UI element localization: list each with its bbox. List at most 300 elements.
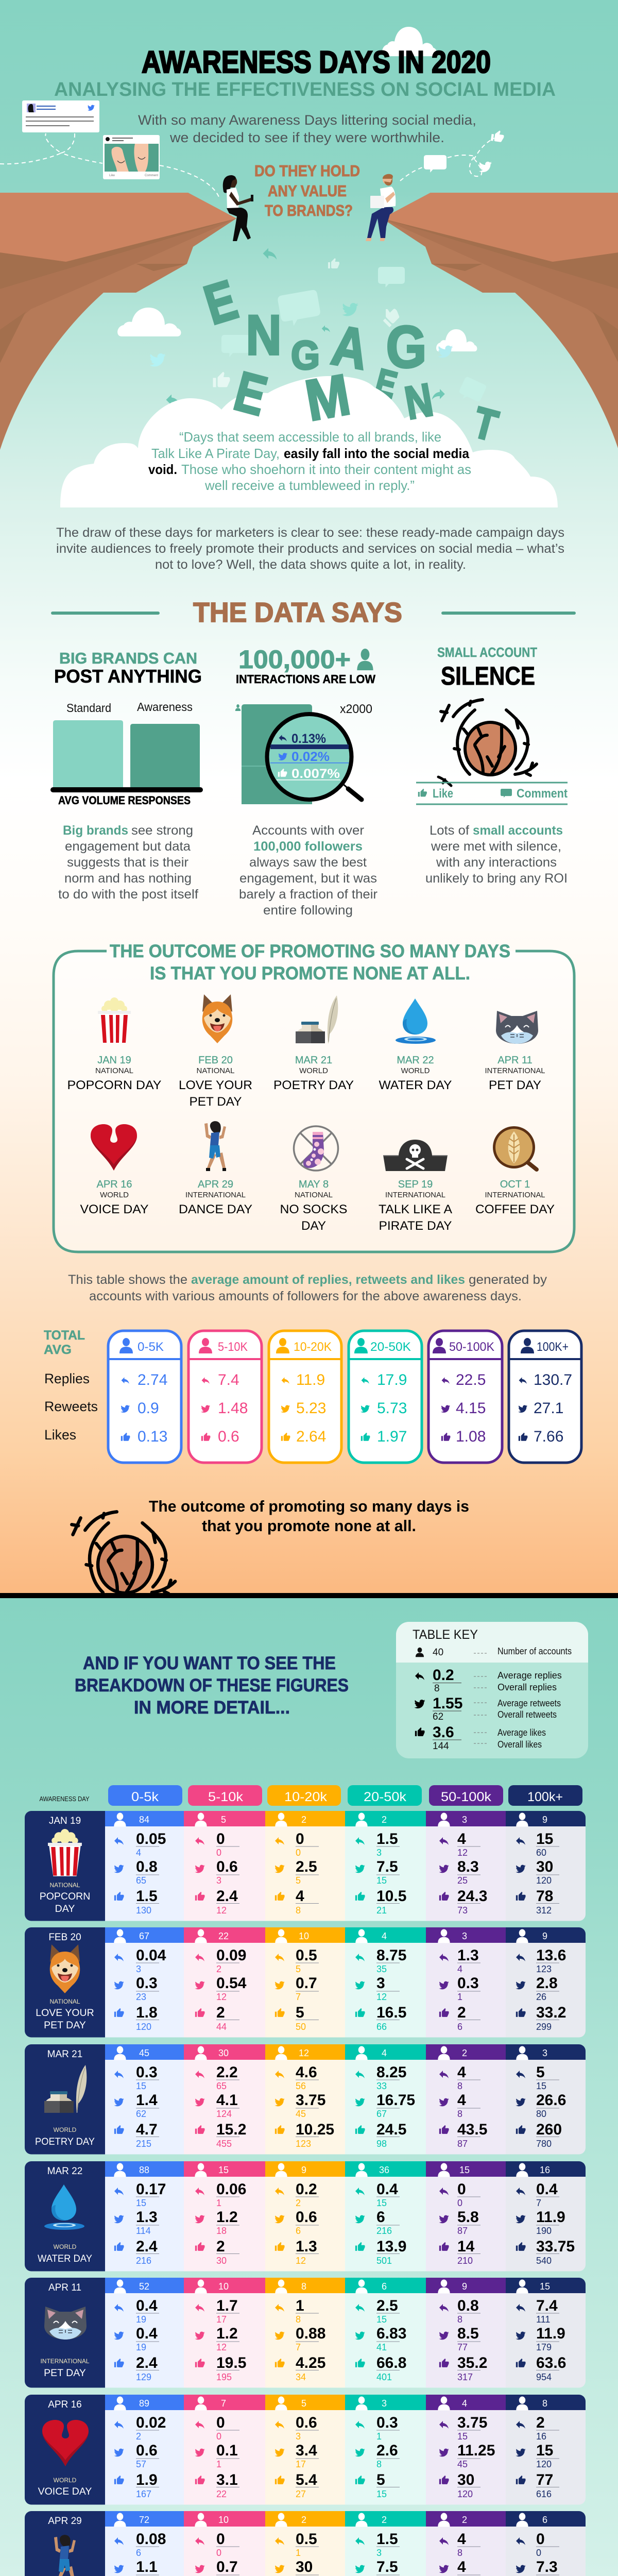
row: Apr 16 voice day: 45 [457,2459,468,2469]
row: Apr 16 voice day: 1.9 [136,2471,158,2488]
panel: big brands: see strong [131,823,193,838]
panel: small account silence: Comment [517,787,568,801]
row: Mar 22 water day: 216 [376,2226,392,2236]
table header: 50-100k [441,1790,492,1804]
quote text: “Days that seem accessible to all brands, like [179,429,441,445]
quote text: Those who shoehorn it into their content might as [181,462,471,477]
table key: Average likes [497,1727,546,1738]
row: Feb 20 love your pet day: 44 [216,2022,227,2032]
row: Apr 29 dance day: 0 [216,2548,221,2558]
row: Feb 20 love your pet day: LOVE YOUR [36,2007,94,2019]
panel: 100,000+ interactions: x2000 [340,702,372,716]
row: Apr 29 dance day [25,2511,586,2576]
row: Feb 20 love your pet day: 8.75 [376,1947,406,1964]
row: Feb 20 love your pet day: 2.8 [536,1975,558,1992]
conclusion text: The outcome of promoting so many days is [149,1497,469,1515]
row: Apr 16 voice day: 0 [216,2431,221,2442]
row: Mar 22 water day: MAR 22 [47,2166,82,2177]
total avg labels: Likes [44,1427,76,1443]
table header: 20-50k [364,1790,407,1804]
row: Apr 11 pet day: 7 [296,2342,301,2352]
row: Feb 20 love your pet day: 4 [457,1964,462,1974]
row: Apr 11 pet day: 2.4 [136,2354,158,2371]
row: Feb 20 love your pet day: 3 [462,1931,467,1941]
row: Mar 22 water day: 15 [136,2198,146,2208]
row: Feb 20 love your pet day: 5 [296,1964,301,1974]
row: Apr 11 pet day: 10 [218,2281,229,2292]
table header: 10-20k [284,1790,328,1804]
row: Apr 11 pet day: 401 [376,2372,392,2382]
row: Jan 19 popcorn day: 15 [536,1831,553,1848]
row: Jan 19 popcorn day: JAN 19 [49,1816,81,1826]
day: talk like a pirate: PIRATE DAY [379,1219,452,1233]
table key: Overall retweets [497,1709,557,1720]
panel: 100,000+ interactions: INTERACTIONS ARE LOW [236,672,375,686]
row: Apr 16 voice day: 8 [542,2398,547,2409]
ground line [0,1593,618,1598]
row: Apr 11 pet day: 1 [296,2297,304,2314]
total card: 100K+: 100K+ [537,1340,569,1354]
row: Mar 22 water day: 7 [536,2198,541,2208]
row: Feb 20 love your pet day: FEB 20 [48,1932,81,1943]
row: Feb 20 love your pet day: 12 [376,1992,387,2002]
row: Mar 22 water day [25,2161,586,2272]
row: Jan 19 popcorn day: 120 [536,1875,552,1886]
day: water [379,998,452,1092]
row: Apr 16 voice day: 3.1 [216,2471,238,2488]
row: Jan 19 popcorn day: 5 [221,1815,226,1825]
row: Mar 21 poetry day: 3.75 [296,2092,325,2109]
row: Feb 20 love your pet day: 2 [216,2004,225,2021]
row: Apr 11 pet day: PET DAY [44,2367,86,2379]
row: Apr 11 pet day: 2.5 [376,2297,398,2314]
day: no socks [280,1126,347,1233]
row: Apr 11 pet day: 8.5 [457,2325,479,2342]
row: Apr 16 voice day: 3 [296,2431,301,2442]
row: Apr 11 pet day: 19 [136,2314,146,2325]
table key: Average replies [497,1670,562,1681]
row: Jan 19 popcorn day: 3 [216,1875,221,1886]
row: Apr 11 pet day: 35.2 [457,2354,487,2371]
row: Mar 21 poetry day: 26.6 [536,2092,566,2109]
row: Apr 29 dance day: 0 [216,2531,225,2548]
row: Apr 16 voice day: 15 [376,2489,387,2499]
row: Apr 16 voice day: 4 [462,2398,467,2409]
word: engagement letters: M [301,362,354,433]
row: Apr 11 pet day: 15 [376,2314,387,2325]
row: Mar 21 poetry day: 4.6 [296,2064,317,2081]
total card: 100K+: 27.1 [534,1400,563,1417]
row: Apr 29 dance day: 6 [542,2515,547,2525]
row: Apr 16 voice day: 3.4 [296,2442,317,2459]
day: dance [179,1121,252,1216]
row: Feb 20 love your pet day: 0.3 [457,1975,479,1992]
row: Mar 22 water day: 30 [216,2256,227,2266]
row: Mar 21 poetry day: 4.1 [216,2092,238,2109]
total card: 20-50K: 20-50K [370,1340,411,1354]
row: Mar 22 water day: 16 [540,2165,550,2175]
row: Apr 29 dance day: 1 [296,2548,301,2558]
row: Apr 16 voice day: 167 [136,2489,151,2499]
table key: 0.2 [433,1667,454,1684]
day: pet: PET DAY [489,1078,541,1092]
total card: 50-100K: 50-100K [449,1340,494,1354]
row: Mar 22 water day: 18 [216,2226,227,2236]
row: Apr 16 voice day: 11.25 [457,2442,495,2459]
row: Mar 21 poetry day: 56 [296,2081,306,2091]
row: Apr 16 voice day: 16 [536,2431,546,2442]
row: Jan 19 popcorn day: 4 [296,1888,304,1905]
row: Apr 29 dance day: 0 [536,2531,545,2548]
row: Apr 11 pet day: 17 [216,2314,227,2325]
row: Feb 20 love your pet day: 3 [136,1964,141,1974]
row: Feb 20 love your pet day: 0.7 [296,1975,317,1992]
table key: Overall likes [497,1739,542,1750]
table header: 5-10k [208,1790,244,1804]
row: Apr 11 pet day: 0.8 [457,2297,479,2314]
day: no socks: NO SOCKS [280,1202,347,1216]
total card: 5-10K: 7.4 [218,1371,239,1388]
row: Mar 21 poetry day: 33 [376,2081,387,2091]
row: Jan 19 popcorn day: 2.5 [296,1858,317,1875]
row: Feb 20 love your pet day: 10 [299,1931,309,1941]
day: voice: APR 16 [97,1179,132,1190]
row: Jan 19 popcorn day: 0 [216,1831,225,1848]
row: Apr 16 voice day: 0.6 [296,2414,317,2431]
row: Jan 19 popcorn day: 84 [139,1815,149,1825]
day: dance: INTERNATIONAL [185,1191,246,1199]
table key: 40 [433,1647,443,1658]
row: Apr 11 pet day: 9 [462,2281,467,2292]
total avg labels [44,1328,98,1443]
magnifier: 0.13% [291,732,326,746]
quote text: Talk Like A Pirate Day, [151,446,280,461]
row: Apr 11 pet day: 15 [540,2281,550,2292]
day: no socks: DAY [301,1219,326,1233]
day: talk like a pirate: TALK LIKE A [379,1202,452,1216]
total card: 0-5K: 2.74 [138,1371,167,1388]
row: Feb 20 love your pet day: 0.54 [216,1975,247,1992]
table key: Overall replies [497,1682,557,1692]
feet photo card: Comment [145,174,158,177]
day: popcorn: POPCORN DAY [67,1078,162,1092]
day: poetry [273,995,354,1092]
panel: 100,000+ interactions: always saw the best [249,855,367,870]
row: Feb 20 love your pet day: 22 [218,1931,229,1941]
body paragraph: not to love? Well, the data shows quite a lot, in reality. [155,557,466,572]
row: Apr 11 pet day: 77 [457,2342,468,2352]
body paragraph: The draw of these days for marketers is clear to see: these ready-made campaign days [56,526,564,540]
cliff left [0,193,236,450]
row: Mar 21 poetry day: 15 [536,2081,546,2091]
total card: 20-50K: 17.9 [377,1371,407,1388]
quote text: void. [148,462,177,477]
intro text: we decided to see if they were worthwhile. [169,130,444,145]
row: Apr 11 pet day: 6 [382,2281,387,2292]
row: Apr 11 pet day: 8 [301,2281,306,2292]
row: Apr 16 voice day: 120 [457,2489,473,2499]
row: Apr 16 voice day: 2.6 [376,2442,398,2459]
row: Apr 11 pet day: 317 [457,2372,473,2382]
row: Apr 11 pet day: 6.83 [376,2325,406,2342]
row: Feb 20 love your pet day: 0.5 [296,1947,317,1964]
row: Apr 29 dance day: 6 [136,2548,141,2558]
row: Jan 19 popcorn day: 2 [301,1815,306,1825]
day: love your pet [179,994,252,1109]
row: Mar 22 water day: 88 [139,2165,149,2175]
row: Feb 20 love your pet day: 1.8 [136,2004,158,2021]
row: Apr 16 voice day: VOICE DAY [38,2486,92,2497]
row: Feb 20 love your pet day: 120 [136,2022,151,2032]
row: Apr 29 dance day: 10 [218,2515,229,2525]
table key: 8 [434,1683,440,1694]
day: water: WORLD [401,1066,430,1075]
row: Jan 19 popcorn day: 12 [457,1848,468,1858]
row: Mar 21 poetry day: 4 [382,2048,387,2058]
total card: 10-20K: 11.9 [296,1371,325,1388]
row: Apr 29 dance day: 4 [457,2558,466,2575]
row: Mar 22 water day: 210 [457,2256,473,2266]
row: Feb 20 love your pet day: 9 [542,1931,547,1941]
day: voice [80,1124,148,1216]
word: engagement letters [197,268,503,450]
day: love your pet: FEB 20 [198,1055,233,1066]
day: coffee: INTERNATIONAL [485,1191,545,1199]
row: Mar 21 poetry day: 80 [536,2109,546,2119]
row: Apr 11 pet day: APR 11 [48,2282,81,2293]
row: Apr 16 voice day: 0 [216,2414,225,2431]
total card: 5-10K [188,1331,262,1463]
row: Mar 22 water day: 14 [457,2238,475,2255]
row: Mar 22 water day: 1 [216,2198,221,2208]
panel: big brands: AVG VOLUME RESPONSES [58,794,191,807]
row: Apr 11 pet day: 8 [296,2314,301,2325]
day: no socks: MAY 8 [299,1179,329,1190]
row: Apr 16 voice day: 5 [376,2471,385,2488]
row: Mar 22 water day: 0.4 [536,2181,558,2198]
panel: small account silence [416,645,568,886]
panel: big brands: Big brands [63,823,128,838]
row: Mar 22 water day: 0.4 [376,2181,398,2198]
twitter post card [22,100,99,132]
row: Apr 11 pet day: 129 [136,2372,151,2382]
row: Feb 20 love your pet day [25,1927,586,2038]
row: Feb 20 love your pet day: 66 [376,2022,387,2032]
panel: 100,000+ interactions: 100,000 followers [253,839,363,854]
question: do they hold any value: DO THEY HOLD [254,162,360,180]
row: Apr 16 voice day: 3.75 [457,2414,487,2431]
panel: small account silence: Like [433,787,453,801]
row: Apr 16 voice day: 0.1 [216,2442,238,2459]
row: Jan 19 popcorn day: 15 [376,1875,387,1886]
day: dance: APR 29 [198,1179,233,1190]
row: Apr 29 dance day: 0 [536,2548,541,2558]
panel: big brands [50,649,203,902]
word: engagement letters: G [291,332,320,378]
row: Apr 16 voice day: 2 [536,2414,545,2431]
row: Apr 11 pet day: 19.5 [216,2354,246,2371]
row: Apr 16 voice day: 15 [536,2442,553,2459]
row: Apr 16 voice day: 57 [136,2459,146,2469]
row: Mar 21 poetry day: 12 [299,2048,309,2058]
row: Apr 29 dance day: 2 [301,2515,306,2525]
heading: breakdown: IN MORE DETAIL... [134,1698,290,1718]
row: Jan 19 popcorn day: 10.5 [376,1888,406,1905]
row: Apr 11 pet day: 41 [376,2342,387,2352]
row: Mar 22 water day: 216 [136,2256,151,2266]
row: Mar 21 poetry day: 15 [136,2081,146,2091]
row: Jan 19 popcorn day: 312 [536,1905,552,1916]
row: Jan 19 popcorn day: 0.8 [136,1858,158,1875]
row: Mar 21 poetry day: 67 [376,2109,387,2119]
table intro text: accounts with various amounts of followers for the above awareness days. [89,1289,522,1303]
heading: breakdown [75,1653,349,1718]
conclusion text: that you promote none at all. [202,1517,416,1535]
row: Mar 22 water day: 11.9 [536,2209,565,2226]
row: Mar 22 water day: 2 [216,2238,225,2255]
total card: 0-5K [108,1331,181,1463]
row: Apr 16 voice day: 0.3 [376,2414,398,2431]
row: Apr 11 pet day: 7.4 [536,2297,558,2314]
row: Jan 19 popcorn day: 9 [542,1815,547,1825]
intro text: With so many Awareness Days littering social media, [138,112,476,128]
day: coffee [475,1126,555,1216]
magnifier: 0.02% [291,750,330,764]
row: Mar 22 water day: 12 [296,2256,306,2266]
day: pet: INTERNATIONAL [485,1066,545,1075]
row: Mar 22 water day: WATER DAY [38,2253,92,2264]
row: Mar 22 water day: 501 [376,2256,392,2266]
panel: big brands: suggests that is their [67,855,188,870]
table key [396,1622,588,1758]
row: Mar 22 water day: 2.4 [136,2238,158,2255]
row: Mar 22 water day: 0 [457,2181,466,2198]
quote text: easily fall into the social media [284,446,470,461]
cloud behind title [382,27,437,56]
row: Mar 22 water day: 0 [457,2198,462,2208]
row: Apr 11 pet day: INTERNATIONAL [40,2358,90,2365]
table header: 100k+ [527,1790,563,1804]
day: talk like a pirate: INTERNATIONAL [385,1191,445,1199]
total card: 5-10K: 5-10K [218,1340,248,1354]
day: poetry: MAR 21 [295,1055,332,1066]
word: engagement letters: E [228,359,273,428]
heading: breakdown: AND IF YOU WANT TO SEE THE [83,1653,336,1673]
row: Feb 20 love your pet day: 299 [536,2022,552,2032]
row: Apr 16 voice day: 15 [457,2431,468,2442]
row: Mar 21 poetry day: 24.5 [376,2121,406,2138]
row: Feb 20 love your pet day: 1.3 [457,1947,479,1964]
row: Mar 21 poetry day: 455 [216,2139,232,2149]
row: Jan 19 popcorn day: 5 [296,1875,301,1886]
total avg labels: AVG [44,1343,72,1357]
row: Feb 20 love your pet day: 0.04 [136,1947,166,1964]
total card: 50-100K: 1.08 [456,1428,486,1445]
row: Mar 22 water day: 5.8 [457,2209,479,2226]
row: Mar 22 water day: 33.75 [536,2238,575,2255]
row: Mar 22 water day: 1.3 [136,2209,158,2226]
row: Apr 16 voice day: 0.6 [136,2442,158,2459]
row: Apr 11 pet day: 4.25 [296,2354,325,2371]
row: Feb 20 love your pet day: 16.5 [376,2004,406,2021]
row: Mar 21 poetry day: 5 [536,2064,545,2081]
quote text: well receive a tumbleweed in reply.” [204,478,415,493]
row: Apr 16 voice day: 3 [382,2398,387,2409]
row: Apr 16 voice day: 5 [301,2398,306,2409]
row: Mar 22 water day: 114 [136,2226,151,2236]
row: Feb 20 love your pet day: 12 [216,1992,227,2002]
row: Feb 20 love your pet day: 50 [296,2022,306,2032]
row: Apr 11 pet day: 19 [136,2342,146,2352]
row: Feb 20 love your pet day: 67 [139,1931,149,1941]
row: Jan 19 popcorn day: 7.5 [376,1858,398,1875]
row: Mar 21 poetry day: 65 [216,2081,227,2091]
total card: 100K+: 7.66 [534,1428,563,1445]
row: Apr 11 pet day: 12 [216,2342,227,2352]
row: Feb 20 love your pet day: 3 [376,1975,385,1992]
row: Feb 20 love your pet day: 35 [376,1964,387,1974]
row: Apr 16 voice day: 7 [221,2398,226,2409]
row: Jan 19 popcorn day: 3 [376,1848,382,1858]
row: Jan 19 popcorn day: 1.5 [136,1888,158,1905]
day: popcorn: NATIONAL [95,1066,133,1075]
row: Mar 21 poetry day: MAR 21 [47,2049,82,2060]
row: Mar 22 water day: 36 [379,2165,389,2175]
row: Mar 21 poetry day: 4 [457,2092,466,2109]
total card: 0-5K: 0.9 [138,1400,159,1417]
subtitle: ANALYSING THE EFFECTIVENESS ON SOCIAL MEDIA [54,79,556,100]
panel: outcome of promoting so many days: THE OUTCOME OF PROMOTING SO MANY DAYS [110,941,510,961]
row: Jan 19 popcorn day: 0.6 [216,1858,238,1875]
row: Mar 21 poetry day: 98 [376,2139,387,2149]
row: Jan 19 popcorn day: 60 [536,1848,546,1858]
day: poetry: WORLD [299,1066,328,1075]
row: Mar 21 poetry day: 62 [136,2109,146,2119]
total card: 0-5K: 0-5K [138,1340,164,1354]
row: Apr 16 voice day: 0.02 [136,2414,166,2431]
row: Feb 20 love your pet day: 0.09 [216,1947,246,1964]
quote cloud [60,376,558,507]
magnifier [267,714,362,800]
panel: big brands: to do with the post itself [58,887,198,902]
row: Feb 20 love your pet day: 23 [136,1992,146,2002]
row: Apr 16 voice day: 89 [139,2398,149,2409]
row: Feb 20 love your pet day: 5 [296,2004,304,2021]
row: Apr 29 dance day: APR 29 [48,2516,82,2527]
background: teal to peach gradient [0,0,618,1593]
row: Mar 21 poetry day: 45 [139,2048,149,2058]
row: Jan 19 popcorn day: 4 [136,1848,141,1858]
panel: small account silence: with any interactions [436,855,557,870]
row: Mar 22 water day: 6 [296,2226,301,2236]
row: Mar 22 water day: 0.17 [136,2181,166,2198]
row: Apr 29 dance day: 72 [139,2515,149,2525]
row: Jan 19 popcorn day: 0 [216,1848,221,1858]
row: Mar 21 poetry day [25,2044,586,2155]
row: Jan 19 popcorn day: 2 [382,1815,387,1825]
day: love your pet: LOVE YOUR [179,1078,252,1092]
day: coffee: COFFEE DAY [475,1202,555,1216]
day: dance: DANCE DAY [179,1202,252,1216]
row: Mar 21 poetry day: WORLD [54,2126,77,2133]
row: Mar 21 poetry day: 8 [457,2109,462,2119]
total card: 50-100K [428,1331,502,1463]
table key: TABLE KEY [413,1628,478,1642]
row: Apr 11 pet day [25,2278,586,2388]
day: poetry: POETRY DAY [273,1078,354,1092]
row: Apr 16 voice day: 22 [216,2489,227,2499]
total card: 5-10K: 0.6 [218,1428,239,1445]
